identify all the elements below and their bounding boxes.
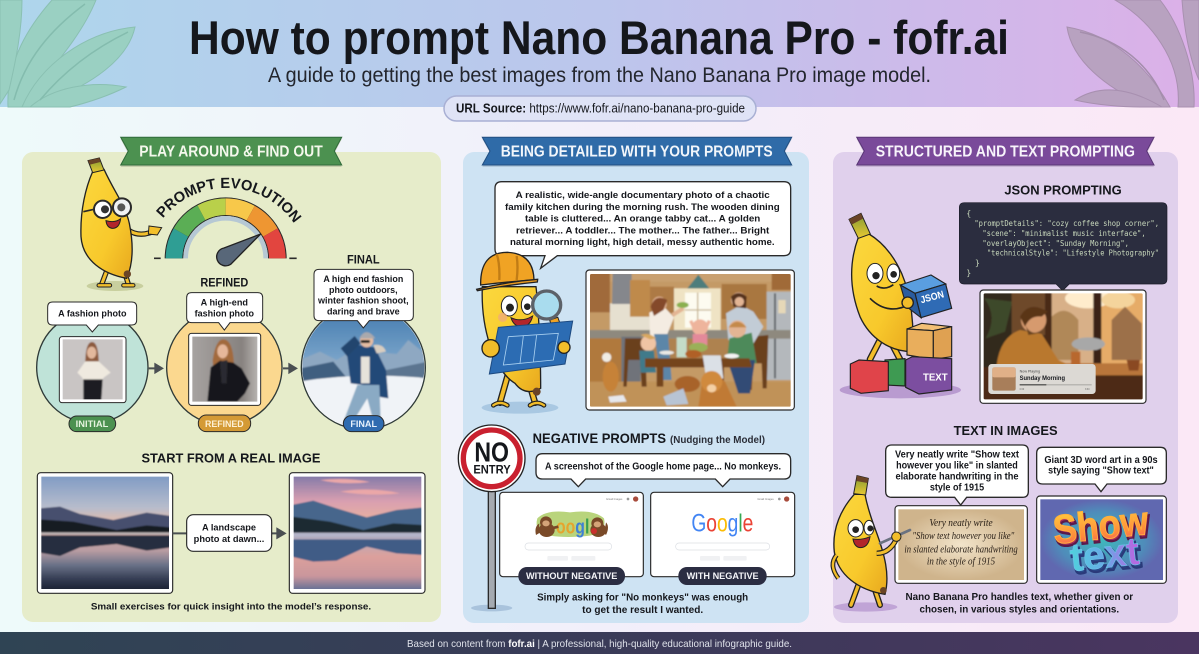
json block: [900, 275, 952, 318]
panel: play around and find out: [22, 136, 441, 622]
stage badge: REFINED: [205, 419, 244, 429]
green block: [885, 359, 905, 386]
caption: Small exercises for quick insight into the model’s response.: [91, 601, 371, 611]
section banner: BEING DETAILED WITH YOUR PROMPTS: [501, 144, 773, 161]
badge: WITH NEGATIVE: [687, 571, 759, 581]
title: How to prompt Nano Banana Pro - fofr.ai: [189, 11, 1009, 64]
section banner: [482, 137, 792, 167]
speech bubble: photo outdoors,: [329, 285, 398, 295]
screenshot: with negative: [651, 492, 795, 585]
json code box: }: [966, 268, 971, 277]
music player card: 3:30: [1085, 389, 1090, 391]
json code box: [959, 203, 1167, 291]
url source pill: URL Source: https://www.fofr.ai/nano-banana-pro-guide: [456, 100, 745, 116]
speech bubble: A high end fashion: [323, 274, 403, 284]
arrow: [149, 364, 162, 372]
screenshot: with negative: Google: [691, 511, 753, 538]
screenshot: without negative: [500, 492, 643, 585]
stage badge: INITIAL: [76, 419, 109, 429]
heading: start from a real image: START FROM A REAL IMAGE: [141, 450, 321, 465]
panel: being detailed with your prompts: [458, 137, 810, 623]
speech bubble: handwriting prompt: [886, 445, 1028, 505]
stage circle: final: [298, 269, 430, 432]
gauge needle: [217, 234, 261, 266]
heading: json prompting: JSON PROMPTING: [1004, 182, 1122, 197]
speech bubble: A high-end: [201, 298, 248, 308]
connector with prompt bubble: photo at dawn...: [194, 534, 264, 544]
caption: Simply asking for "No monkeys" was enough: [537, 593, 748, 604]
right banana leaves: [1067, 0, 1199, 107]
badge: [678, 567, 767, 585]
banana with paintbrush: [833, 476, 910, 612]
handwriting image: in slanted elaborate handwriting: [904, 543, 1018, 555]
handwriting image: in the style of 1915: [927, 555, 996, 567]
speech bubble: fashion photo: [195, 309, 255, 319]
heading: text in images: TEXT IN IMAGES: [954, 423, 1058, 438]
stage circle: refined: [167, 293, 282, 432]
heading: negative prompts: (Nudging the Model): [670, 435, 765, 446]
banana with hard hat and blueprint: [477, 252, 573, 414]
prompt speech bubble: [495, 182, 791, 268]
speech bubble: handwriting prompt: elaborate handwriting in the: [895, 472, 1019, 483]
speech bubble: word art prompt: Giant 3D word art in a 90s: [1044, 455, 1158, 466]
prompt speech bubble: retriever... A toddler... The mother... The father... Bright: [516, 225, 769, 235]
heading: negative prompts: [533, 430, 765, 446]
stage label: refined: REFINED: [200, 276, 248, 290]
handwriting image: "Show text however you like": [912, 530, 1015, 542]
caption: [537, 593, 748, 616]
gauge heading: PROMPT EVOLUTION: [156, 178, 302, 223]
caption: [905, 592, 1133, 615]
json code box: {: [966, 209, 971, 218]
3d word art image: Show: [1051, 497, 1151, 553]
result lake photo: [289, 473, 425, 593]
heading: negative prompts: NEGATIVE PROMPTS: [533, 430, 666, 446]
prompt speech bubble: natural morning light, high detail, messy authentic home.: [510, 237, 775, 247]
json code box: }: [975, 259, 980, 268]
screenshot: without negative: Gmail Images: [606, 497, 623, 501]
3d word art image: [1037, 496, 1166, 583]
no entry sign: ENTRY: [473, 463, 511, 477]
red block: [850, 360, 888, 393]
speech bubble: A fashion photo: [58, 308, 127, 318]
header band: [0, 0, 1199, 107]
stage circle: initial: [37, 302, 148, 432]
stage label: final: FINAL: [347, 252, 380, 266]
music player card: 0:00: [1020, 389, 1025, 391]
left banana leaves: [0, 0, 135, 107]
stage badge: FINAL: [350, 419, 378, 429]
caption: Nano Banana Pro handles text, whether given or: [905, 592, 1133, 603]
speech bubble: handwriting prompt: Very neatly write "Show text: [895, 450, 1020, 461]
json block: JSON: [919, 289, 945, 306]
no monkeys speech bubble: A screenshot of the Google home page... No monkeys.: [545, 462, 781, 473]
speech bubble: handwriting prompt: style of 1915: [930, 482, 985, 493]
gauge: prompt evolution: [154, 178, 302, 266]
connector with prompt bubble: [173, 515, 285, 551]
no monkeys speech bubble: [536, 454, 791, 487]
caption: chosen, in various styles and orientations.: [919, 604, 1119, 615]
json code box: "promptDetails": "cozy coffee shop corner",: [974, 219, 1159, 228]
stage badge: [343, 416, 384, 432]
banana with glasses: [81, 158, 162, 291]
coffee shop photo with player overlay: [980, 288, 1146, 403]
speech bubble: word art prompt: style saying "Show text": [1048, 466, 1154, 477]
speech bubble: [187, 293, 263, 330]
panel: structured and text prompting: [833, 137, 1178, 623]
json code box: "technicalStyle": "Lifestyle Photography": [987, 249, 1159, 258]
no entry sign: NO: [474, 436, 509, 467]
prompt speech bubble: A realistic, wide-angle documentary photo of a chaotic: [516, 190, 770, 200]
connector with prompt bubble: A landscape: [202, 523, 256, 533]
music player card: Sunday Morning: [1020, 375, 1065, 382]
screenshot: without negative: oogl: [556, 517, 589, 539]
handwriting image: [895, 506, 1027, 583]
speech bubble: [314, 269, 413, 328]
arrow: [283, 364, 296, 372]
speech bubble: handwriting prompt: however you like" in slanted: [896, 461, 1018, 472]
monkey doodles: [535, 516, 608, 537]
3d word art image: Show: [1052, 500, 1152, 556]
url source pill: [444, 96, 756, 121]
footer: Based on content from fofr.ai | A professional, high-quality educational infographic guide.: [407, 638, 792, 650]
music player card: [988, 364, 1096, 394]
section banner: STRUCTURED AND TEXT PROMPTING: [876, 144, 1135, 161]
badge: [518, 567, 625, 585]
speech bubble: daring and brave: [327, 306, 400, 316]
banana with blocks: [840, 213, 961, 398]
json code box: "scene": "minimalist music interface",: [982, 229, 1146, 238]
footer: [0, 632, 1199, 654]
section banner: PLAY AROUND & FIND OUT: [139, 144, 323, 161]
subtitle: A guide to getting the best images from the Nano Banana Pro image model.: [268, 63, 931, 87]
section banner: [857, 137, 1154, 167]
prompt speech bubble: table is cluttered... An orange tabby cat... A golden: [525, 214, 761, 224]
handwriting image: Very neatly write: [929, 517, 993, 529]
section banner: [121, 137, 342, 167]
music player card: Now Playing: [1020, 369, 1040, 373]
3d word art image: text: [1068, 529, 1141, 580]
text block: TEXT: [923, 373, 948, 384]
speech bubble: word art prompt: [1037, 447, 1166, 492]
text block: [906, 357, 952, 394]
source lake photo: [37, 473, 173, 593]
caption: to get the result I wanted.: [582, 605, 703, 616]
badge: WITHOUT NEGATIVE: [526, 571, 617, 581]
no entry sign: [458, 425, 525, 611]
screenshot: with negative: Gmail Images: [757, 497, 774, 501]
3d word art image: text: [1070, 532, 1143, 583]
speech bubble: winter fashion shoot,: [317, 296, 409, 306]
orange block: [907, 323, 952, 359]
json code box: "overlayObject": "Sunday Morning",: [982, 239, 1129, 248]
prompt speech bubble: family kitchen during the morning rush. The wooden dining: [505, 202, 780, 212]
kitchen illustration: [586, 270, 810, 410]
